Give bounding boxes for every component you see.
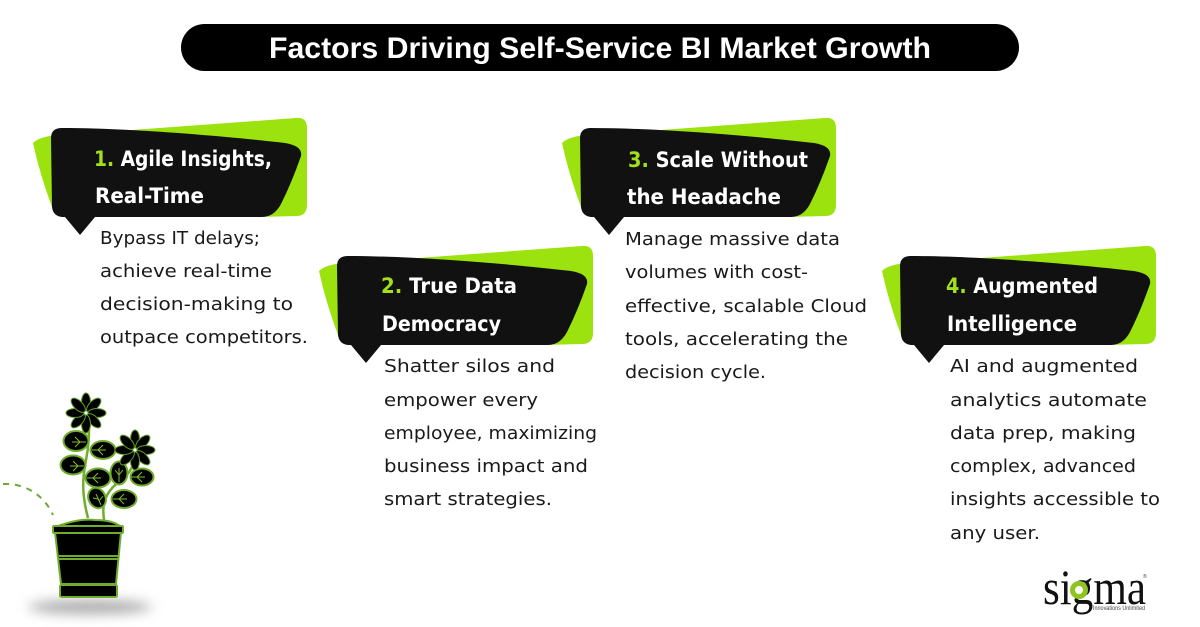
- heading 3: 3. Scale Without: [628, 148, 808, 172]
- body text 1: Bypass IT delays;: [100, 228, 260, 249]
- title banner: Factors Driving Self-Service BI Market Growth: [269, 32, 931, 65]
- leaves: [60, 431, 154, 511]
- panel: factor 4 augmented intelligence: Intelligence: [947, 312, 1077, 336]
- logo: sigma: Innovations Unlimited: [1093, 605, 1145, 612]
- heading 4: 4. Augmented: [946, 274, 1098, 298]
- panel: factor 3 scale without the headache: [562, 118, 867, 383]
- body text 3: volumes with cost-: [625, 262, 808, 283]
- flower 1: [66, 393, 106, 433]
- logo: sigma: sigma: [1043, 559, 1146, 615]
- callout shape 1: [33, 118, 307, 235]
- pot shadow: [28, 600, 152, 614]
- body text 2: employee, maximizing: [384, 423, 597, 444]
- stems: [83, 425, 135, 520]
- dashed growth arrow: [3, 484, 53, 515]
- callout shape 3: [562, 118, 836, 235]
- body text 3: tools, accelerating the: [625, 329, 848, 350]
- title banner: [181, 24, 1019, 71]
- panel: factor 2 true data democracy: [319, 246, 597, 510]
- heading 1: 1. Agile Insights,: [94, 147, 272, 171]
- body text 4: AI and augmented: [950, 356, 1138, 377]
- pot: [53, 520, 123, 597]
- panel: factor 1 agile insights: [33, 118, 308, 348]
- body text 1: [100, 228, 308, 348]
- body text 2: smart strategies.: [384, 489, 552, 510]
- flower 2: [115, 430, 155, 470]
- panel: factor 1 agile insights: Real-Time: [95, 184, 204, 208]
- body text 1: achieve real-time: [100, 261, 272, 282]
- callout shape 2: [319, 246, 593, 363]
- body text 2: empower every: [384, 390, 538, 411]
- icon: potted plant: [3, 393, 155, 614]
- panel: factor 2 true data democracy: Democracy: [382, 312, 501, 336]
- body text 2: [384, 356, 597, 510]
- panel: factor 3 scale without the headache: the Headache: [627, 185, 781, 209]
- body text 4: [950, 356, 1160, 544]
- body text 4: complex, advanced: [950, 456, 1136, 477]
- body text 3: decision cycle.: [625, 362, 766, 383]
- body text 1: outpace competitors.: [100, 327, 308, 348]
- callout shape 4: [882, 246, 1156, 363]
- body text 2: Shatter silos and: [384, 356, 555, 377]
- body text 3: effective, scalable Cloud: [625, 296, 867, 317]
- body text 3: [625, 229, 867, 383]
- body text 4: data prep, making: [950, 423, 1136, 444]
- panel: factor 4 augmented intelligence: [882, 246, 1160, 544]
- leaf veins: [70, 437, 145, 505]
- logo: sigma: ®: [1143, 573, 1147, 580]
- heading 2: 2. True Data: [381, 274, 517, 298]
- body text 4: insights accessible to: [950, 489, 1160, 510]
- body text 1: decision-making to: [100, 294, 293, 315]
- body text 4: analytics automate: [950, 390, 1147, 411]
- body text 2: business impact and: [384, 456, 588, 477]
- body text 3: Manage massive data: [625, 229, 840, 250]
- body text 4: any user.: [950, 523, 1040, 544]
